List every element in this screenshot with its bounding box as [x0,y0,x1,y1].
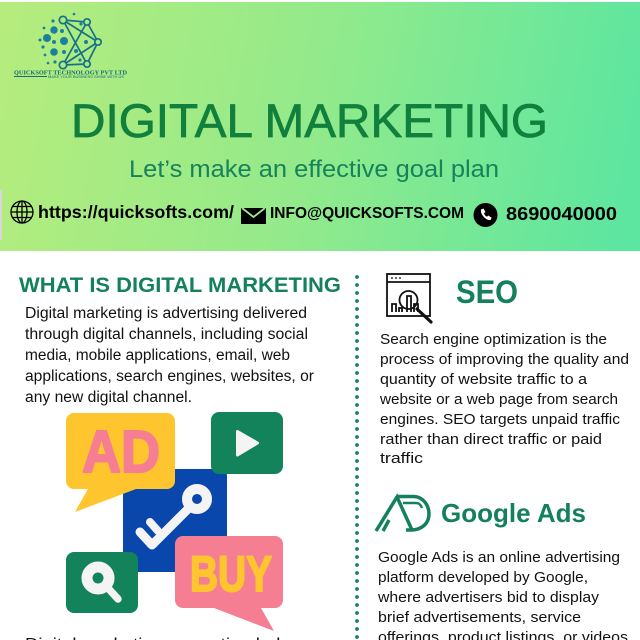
text block: SEO description: website or a web page from search [379,391,618,408]
green search tile [66,552,138,613]
text block: Google Ads description: Google Ads is an online advertising [378,549,620,566]
panel: what is digital marketing [19,274,341,640]
contact: website: https://quicksofts.com/ [38,202,234,222]
icon: envelope [241,208,266,224]
company tagline: MAKE YOUR BUSINESS SHINE WITH US [48,75,125,79]
pink BUY bubble [175,536,283,631]
header banner [0,2,640,251]
illustration: digital ads [66,412,283,631]
text block: SEO description: quantity of website traffic to a [380,371,588,388]
divider: dotted line [355,275,359,639]
text block: definition: media, mobile applications, email, web [25,347,290,364]
company logo [14,13,127,79]
text block: SEO description [379,331,629,467]
text block: Google Ads description: where advertisers bid to display [377,589,600,606]
text block: SEO description: Search engine optimization is the [380,331,607,348]
text block: SEO description: traffic [380,450,424,467]
green play tile [211,412,283,474]
heading: WHAT IS DIGITAL MARKETING [19,274,341,297]
text block: SEO description: engines. SEO targets unpaid traffic [380,411,621,428]
text block: definition: Digital marketing is advertising delivered [25,305,307,322]
text block: definition: any new digital channel. [25,389,192,406]
text block: SEO description: rather than direct traffic or paid [380,431,602,448]
text block: SEO description: process of improving the quality and [380,351,629,368]
icon: globe [11,201,33,223]
yellow AD bubble: AD [82,419,160,485]
company name: QUICKSOFT TECHNOLOGY PVT LTD [14,70,127,76]
text block: Google Ads description [377,549,628,640]
panel: SEO [379,274,629,467]
contact: email: INFO@QUICKSOFTS.COM [270,205,464,222]
text block: definition [25,305,314,406]
yellow AD bubble [66,413,175,512]
heading: SEO [456,274,518,310]
heading: Google Ads [441,498,586,528]
icon: phone [474,203,498,227]
text block: Google Ads description: platform developed by Google, [378,569,588,586]
contact: phone: 8690040000 [506,204,617,224]
text block: definition: applications, search engines, websites, or [25,368,314,385]
subtitle: Let’s make an effective goal plan [129,156,499,183]
title: DIGITAL MARKETING [71,95,548,148]
contact: phone [474,203,617,227]
icon: AD logo [376,496,429,531]
icon: SEO analytics window [387,274,431,322]
pink BUY bubble: BUY [190,546,272,602]
panel: Google Ads [376,496,628,640]
blue key tile [123,469,227,572]
text block: Google Ads description: brief advertisements, service [378,609,581,626]
text block: definition: through digital channels, including social [25,326,308,343]
